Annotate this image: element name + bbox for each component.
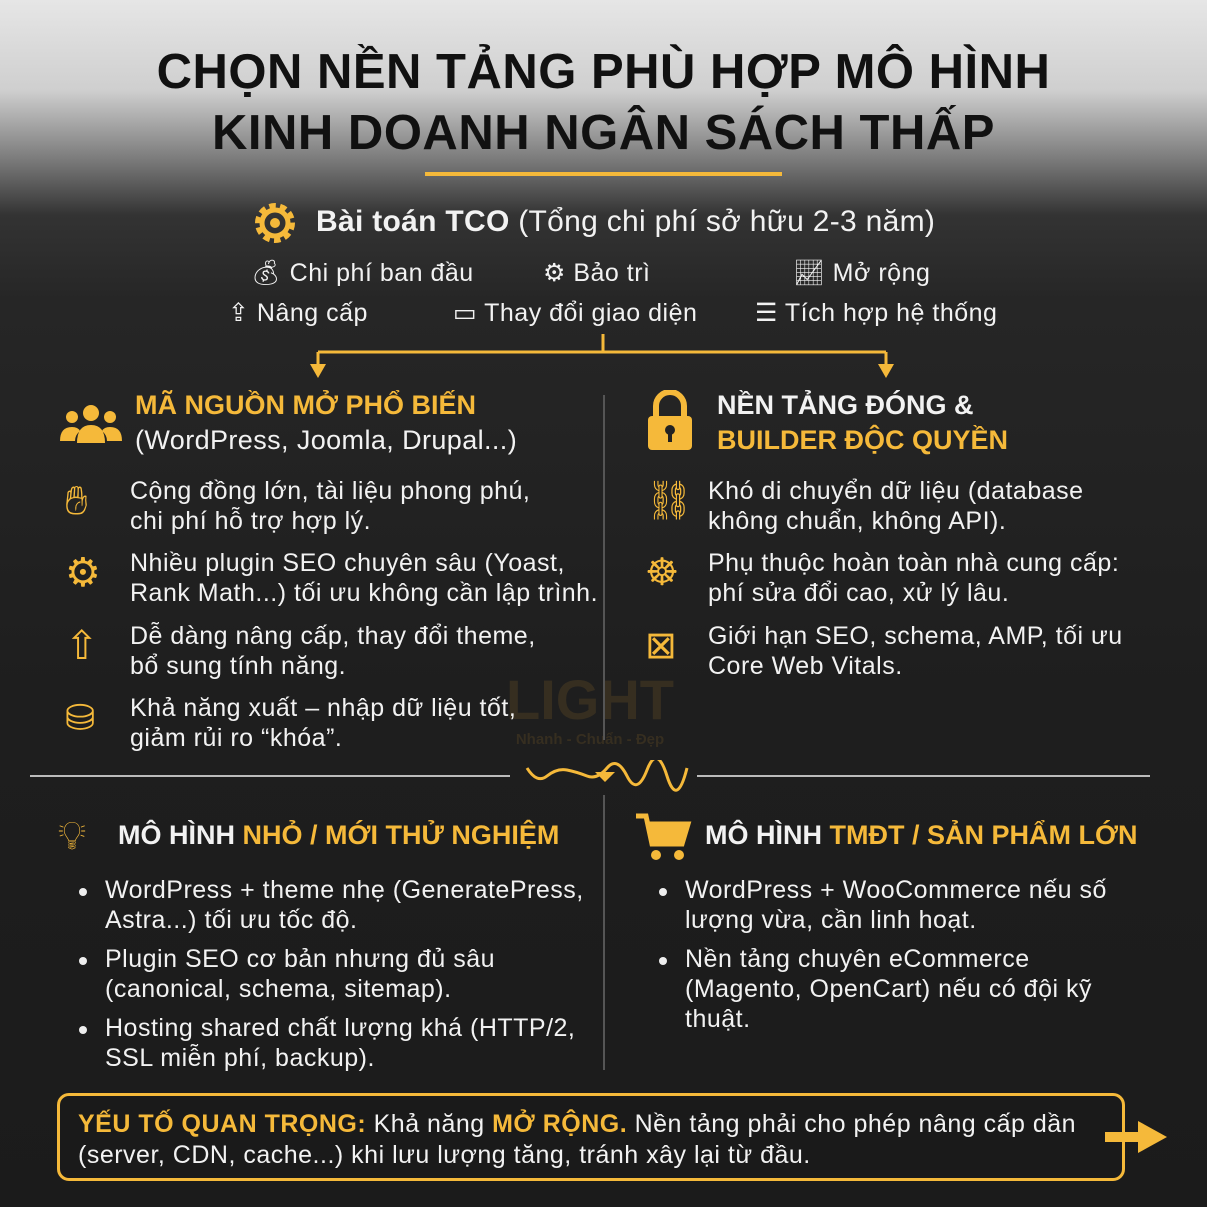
title: KINH DOANH NGÂN SÁCH THẤP (212, 106, 995, 160)
callout: YẾU TỐ QUAN TRỌNG: Khả năng MỞ RỘNG. Nền tảng phải cho phép nâng cấp dần (78, 1110, 1076, 1138)
arrow: callout right (1105, 1121, 1167, 1153)
panel: small model: WordPress + theme nhẹ (GeneratePress, (105, 876, 584, 904)
panel: ecommerce (636, 814, 1138, 1033)
panel: closed platforms: ☸ (645, 552, 679, 594)
icon: gear (255, 203, 295, 243)
panel: open source: ⇧ (65, 624, 99, 668)
panel: small model (58, 814, 584, 1072)
text: ▭ Thay đổi giao diện (453, 299, 697, 327)
panel: open source: Nhiều plugin SEO chuyên sâu (Yoast, (130, 549, 565, 577)
panel: ecommerce: (Magento, OpenCart) nếu có đội kỹ (685, 975, 1092, 1003)
arrow: split connector (310, 334, 894, 378)
panel: open source: ✋︎ (65, 479, 88, 523)
horizontal divider with wave (30, 760, 1150, 792)
panel: closed platforms: NỀN TẢNG ĐÓNG & (717, 390, 974, 420)
item 4 (65, 694, 516, 752)
panel: ecommerce: MÔ HÌNH TMĐT / SẢN PHẨM LỚN (705, 820, 1138, 850)
icon: cart (636, 814, 692, 860)
panel: open source: Cộng đồng lớn, tài liệu phong phú, (130, 477, 530, 505)
TCO items: 💰︎ Chi phí ban đầu (250, 259, 474, 287)
title underline (425, 172, 782, 176)
text: ⇪ Nâng cấp (228, 299, 368, 327)
panel: ecommerce: thuật. (685, 1005, 751, 1033)
item 3 (65, 622, 536, 680)
text: ⚙ Bảo trì (543, 259, 651, 287)
watermark logo: Nhanh - Chuẩn - Đẹp (516, 731, 664, 748)
icon: lock (648, 390, 692, 450)
panel: small model: Hosting shared chất lượng khá (HTTP/2, (105, 1014, 575, 1042)
panel: open source: Khả năng xuất – nhập dữ liệu tốt, (130, 694, 516, 722)
panel: open source: bổ sung tính năng. (130, 652, 346, 680)
panel: closed platforms: Phụ thuộc hoàn toàn nhà cung cấp: (708, 549, 1119, 577)
icon: bulb: 💡︎ (58, 814, 86, 858)
panel: small model: (canonical, schema, sitemap). (105, 975, 452, 1003)
callout (57, 1093, 1125, 1181)
panel: ecommerce: WordPress + WooCommerce nếu số (685, 876, 1107, 904)
panel: small model: Astra...) tối ưu tốc độ. (105, 906, 357, 934)
text: ☰ Tích hợp hệ thống (755, 299, 997, 327)
text: Bài toán TCO (Tổng chi phí sở hữu 2-3 năm) (316, 205, 935, 238)
panel: closed platforms: không chuẩn, không API). (708, 507, 1006, 535)
text: 📈︎ Mở rộng (793, 259, 930, 287)
panel: closed platforms: ⊠ (645, 625, 677, 667)
panel: open source: giảm rủi ro “khóa”. (130, 724, 342, 752)
panel: open source: Rank Math...) tối ưu không cần lập trình. (130, 579, 598, 607)
panel: ecommerce: lượng vừa, cần linh hoạt. (685, 906, 977, 934)
panel: open source: ⚙ (65, 551, 101, 595)
panel: closed platforms: phí sửa đổi cao, xử lý lâu. (708, 579, 1009, 607)
panel: closed platforms: Giới hạn SEO, schema, AMP, tối ưu (708, 622, 1123, 650)
panel: open source: MÃ NGUỒN MỞ PHỔ BIẾN (135, 390, 476, 420)
icon: people (60, 405, 122, 443)
panel: closed platforms: ⛓ (645, 480, 693, 522)
panel: small model: Plugin SEO cơ bản nhưng đủ sâu (105, 945, 495, 973)
watermark logo: LIGHT (506, 668, 674, 731)
TCO heading (255, 203, 935, 243)
panel: closed platforms: BUILDER ĐỘC QUYỀN (717, 425, 1008, 455)
title (157, 44, 1050, 160)
panel: small model: MÔ HÌNH NHỎ / MỚI THỬ NGHIỆM (118, 820, 559, 850)
title: CHỌN NỀN TẢNG PHÙ HỢP MÔ HÌNH (157, 45, 1050, 99)
panel: open source: chi phí hỗ trợ hợp lý. (130, 507, 371, 535)
item 2 (65, 549, 598, 607)
callout: (server, CDN, cache...) khi lưu lượng tăng, tránh xây lại từ đầu. (78, 1141, 811, 1169)
panel: closed platforms: Core Web Vitals. (708, 652, 903, 680)
panel: open source: Dễ dàng nâng cấp, thay đổi theme, (130, 622, 536, 650)
panel: small model: SSL miễn phí, backup). (105, 1044, 375, 1072)
item 1 (65, 477, 530, 535)
panel: closed platforms: Khó di chuyển dữ liệu (database (708, 477, 1084, 505)
panel: open source (60, 390, 598, 752)
vertical dividers (603, 395, 605, 740)
panel: open source: (WordPress, Joomla, Drupal...) (135, 425, 517, 455)
panel: open source: ⛁ (65, 697, 95, 738)
panel: ecommerce: Nền tảng chuyên eCommerce (685, 945, 1030, 973)
panel: closed platforms (645, 390, 1123, 680)
